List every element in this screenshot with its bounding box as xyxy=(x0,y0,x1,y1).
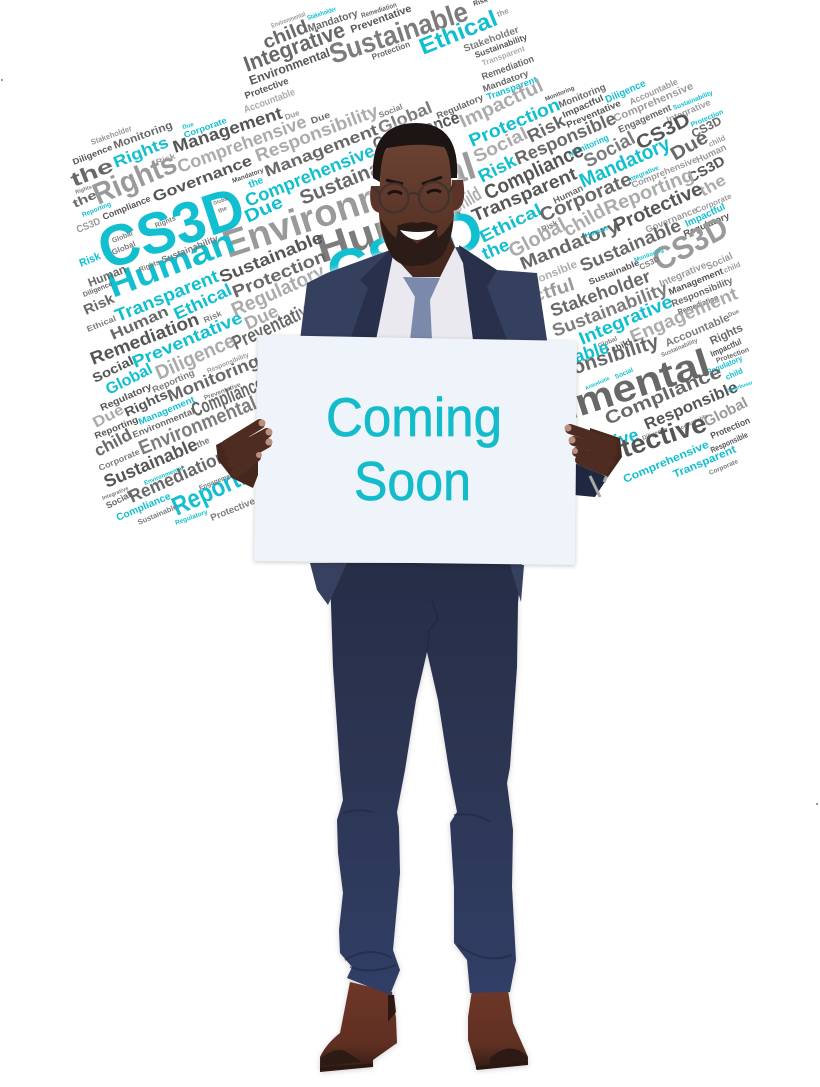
word cloud: right body cluster: Compliance xyxy=(602,361,725,429)
word cloud: right body cluster: Impactful xyxy=(709,336,743,359)
word cloud: right body cluster: Responsible xyxy=(510,258,579,296)
fingers xyxy=(570,429,612,470)
word cloud: top handle cluster: Ethical xyxy=(415,5,501,60)
word cloud: left body cluster: Sustainable xyxy=(136,502,179,527)
word cloud: right body cluster: Regulatory xyxy=(435,92,485,121)
sign board xyxy=(254,335,577,565)
word cloud: right body cluster: CS3D xyxy=(646,209,734,278)
word cloud: right body cluster: Sustainability xyxy=(672,89,714,112)
word cloud: top handle cluster: Preventative xyxy=(349,3,413,36)
lower body xyxy=(320,563,528,1072)
word cloud: left body cluster: Environmental xyxy=(218,145,481,267)
word cloud: right body cluster: Sustainable xyxy=(577,215,684,276)
word cloud: right body cluster: Solarbuear xyxy=(727,380,754,394)
word cloud: left body cluster: Rights xyxy=(111,134,171,172)
word cloud: left body cluster: Monitoring xyxy=(112,119,174,152)
word cloud: left body cluster: the xyxy=(68,155,117,192)
word cloud: right body cluster: Sustainability xyxy=(660,338,699,359)
hand: left xyxy=(216,420,272,488)
word cloud: right body cluster: Impactful xyxy=(561,93,605,120)
word cloud: right body cluster: child xyxy=(448,183,485,217)
shirt xyxy=(376,247,473,340)
hair xyxy=(373,123,457,182)
word cloud: right body cluster: Accountable xyxy=(628,77,679,107)
word cloud: left body cluster: Engagement xyxy=(198,470,238,492)
word cloud: left body cluster: Regulatory xyxy=(228,260,329,322)
word cloud: right body cluster: Monitoring xyxy=(557,82,608,111)
jacket xyxy=(260,247,560,470)
word cloud: top handle cluster: Remediation xyxy=(480,54,536,83)
smile xyxy=(400,230,435,240)
word cloud: left body cluster: Integrative xyxy=(102,486,130,502)
tie xyxy=(403,277,440,340)
word cloud: right body cluster: Accountable xyxy=(663,312,732,350)
word cloud: left body cluster: Preventative xyxy=(229,297,320,355)
word cloud: left body cluster: the xyxy=(195,435,211,450)
word cloud: right body cluster: the xyxy=(696,172,729,200)
word cloud: right body cluster: Preventative xyxy=(535,424,641,476)
word cloud: top handle cluster: Stakeholder xyxy=(306,6,338,22)
word cloud: left body cluster: Risk xyxy=(202,309,224,325)
palm xyxy=(216,430,258,488)
word cloud: left body cluster: Sustainability xyxy=(160,233,219,265)
word cloud: left body cluster: Sustainable xyxy=(297,146,411,210)
word cloud: right body cluster xyxy=(370,75,754,486)
word cloud: left body cluster: Comprehensive xyxy=(242,140,377,211)
word cloud: left body cluster: Diligence xyxy=(71,142,114,167)
word cloud: right body cluster: Comprehensive xyxy=(630,154,699,190)
word cloud: right body cluster: Responsible xyxy=(512,108,619,169)
word cloud: top handle cluster: Transparent xyxy=(485,74,538,102)
word cloud: right body cluster: Protection xyxy=(466,94,563,151)
word cloud: top handle cluster: Mandatory xyxy=(306,7,360,35)
word cloud: left body cluster: the xyxy=(218,206,229,215)
word cloud: left body cluster: the xyxy=(247,175,265,191)
sign text: Soon: Soon xyxy=(354,450,471,512)
word cloud: top handle cluster: Protection xyxy=(370,39,411,62)
word cloud: right body cluster: Human xyxy=(584,225,609,240)
head xyxy=(370,123,464,277)
word cloud: right body cluster: Protective xyxy=(573,407,710,478)
word cloud: right body cluster: Human xyxy=(695,142,728,166)
word cloud: right body cluster: CS3D xyxy=(633,109,694,154)
word cloud: left body cluster: Protective xyxy=(209,496,257,524)
word cloud: left body cluster: Preventative xyxy=(203,381,242,402)
word cloud: right body cluster: Diligence xyxy=(604,78,648,106)
word cloud: left body cluster: Compliance xyxy=(115,491,173,524)
word cloud: left body cluster: Protection xyxy=(229,247,329,302)
word cloud: right body cluster: Stakeholder xyxy=(548,266,653,321)
word cloud: left body cluster: Due xyxy=(241,301,281,334)
word cloud: left body cluster: Management xyxy=(170,103,285,157)
word cloud: right body cluster: Mandatory xyxy=(517,216,622,274)
word cloud: left body cluster: Reporting xyxy=(93,414,139,441)
word cloud: left body cluster: Global xyxy=(103,361,155,399)
word cloud: right body cluster: Responsibility xyxy=(522,330,663,395)
sign text: Coming: Coming xyxy=(326,386,502,448)
ears xyxy=(370,180,464,213)
word cloud: left body cluster: Environmental xyxy=(131,406,196,440)
word cloud: right body cluster: Impactful xyxy=(456,75,547,133)
word cloud: right body cluster: Risk xyxy=(540,218,560,234)
word cloud: left body cluster: Environmental xyxy=(144,466,185,487)
word cloud: left body cluster: Regulatory xyxy=(174,509,209,527)
word cloud: right body cluster: Regulatory xyxy=(682,210,731,239)
word cloud: left body cluster: Rights xyxy=(88,147,182,211)
word cloud: top handle cluster: Accountable xyxy=(242,87,297,116)
word cloud: right body cluster: Diligence xyxy=(642,426,669,442)
word cloud: right body cluster: Impactful xyxy=(684,201,727,230)
word cloud: left body cluster: Due xyxy=(241,192,286,227)
word cloud: right body cluster: CS3D xyxy=(689,114,724,141)
word cloud: left body cluster: Rights xyxy=(75,184,93,196)
word cloud: left body cluster: Global xyxy=(111,230,134,245)
word cloud: left body cluster: Diligence xyxy=(82,281,114,299)
word cloud: left body cluster: Ethical xyxy=(85,314,117,334)
word cloud: left body cluster: Regulatory xyxy=(99,381,154,414)
word cloud: top handle cluster: Environmental xyxy=(270,11,307,30)
word cloud: right body cluster: Management xyxy=(667,266,725,297)
word cloud: left body cluster: Human xyxy=(108,303,171,344)
person holding sign xyxy=(216,123,622,1072)
word cloud: top handle cluster: child xyxy=(260,17,311,54)
word cloud: right body cluster: Responsibility xyxy=(670,275,735,310)
word cloud: right body cluster: Global xyxy=(505,214,570,262)
word cloud: left body cluster: Social xyxy=(377,102,404,120)
word cloud: left body cluster: Mandatory xyxy=(231,167,265,185)
word cloud: left body cluster: Social xyxy=(90,353,136,386)
beard xyxy=(380,218,453,266)
word cloud: left body cluster: Environmental xyxy=(136,392,260,460)
word cloud: right body cluster: Comprehensive xyxy=(621,439,711,486)
word cloud: right body cluster: Corporate xyxy=(537,169,635,227)
word cloud: left body cluster: Transparent xyxy=(112,266,221,326)
word cloud: left body cluster: CS3D xyxy=(319,196,491,307)
word cloud: left body cluster: Corporate xyxy=(97,446,142,473)
word cloud: right body cluster: Social xyxy=(614,367,634,381)
word cloud: right body cluster: Integrative xyxy=(665,97,712,125)
word cloud: right body cluster: Protection xyxy=(709,415,751,441)
eyes xyxy=(388,190,441,194)
word cloud: top handle cluster: Integrative xyxy=(240,17,348,77)
word cloud: left body cluster: Comprehensive xyxy=(175,111,309,177)
word cloud: left body cluster: Compliance xyxy=(189,373,266,422)
boot: left xyxy=(320,982,397,1072)
word cloud: right body cluster: Antioduitie xyxy=(584,376,611,392)
word cloud: right body cluster: child xyxy=(609,337,633,355)
word cloud: left body cluster: Rights xyxy=(138,259,161,274)
word cloud: right body cluster: Preventative xyxy=(565,98,622,130)
word cloud: right body cluster: Ethical xyxy=(476,200,545,247)
upper body xyxy=(260,123,613,497)
word cloud: right body cluster: Remediation xyxy=(676,293,720,317)
word cloud: right body cluster: Sustainable xyxy=(587,257,641,287)
word cloud: briefcase shape xyxy=(68,0,754,527)
word cloud: right body cluster: Engagement xyxy=(617,102,674,136)
word cloud: right body cluster: Social xyxy=(705,251,735,273)
word cloud: right body cluster: Global xyxy=(597,335,619,350)
word cloud: left body cluster: Responsibility xyxy=(206,352,250,375)
sign panel xyxy=(254,335,577,565)
word cloud: right body cluster: child xyxy=(560,201,609,241)
word cloud: left body cluster: Ethical xyxy=(171,280,235,324)
word cloud: left body cluster xyxy=(68,100,491,527)
word cloud: right body cluster: Engagement xyxy=(627,283,740,347)
word cloud: right body cluster: Mandatory xyxy=(576,133,674,193)
word cloud: top handle cluster xyxy=(240,0,538,116)
word cloud: left body cluster: Risk xyxy=(81,290,117,318)
word cloud: right body cluster: Sustainability xyxy=(549,278,670,341)
word cloud: right body cluster: Due xyxy=(728,309,741,319)
jacket sleeve: right xyxy=(574,463,608,497)
word cloud: right body cluster: CS3D xyxy=(685,152,727,186)
boot: right xyxy=(468,990,528,1070)
word cloud: right body cluster: Accountable xyxy=(676,413,709,433)
word cloud: left body cluster: Global xyxy=(110,239,137,257)
word cloud: right body cluster: Monitoring xyxy=(567,132,610,159)
word cloud: left body cluster: Governance xyxy=(150,152,254,206)
word cloud: right body cluster: Risk xyxy=(475,150,520,187)
word cloud: top handle cluster: Mandatory xyxy=(481,68,530,94)
jacket flap: right xyxy=(510,565,524,602)
word cloud: left body cluster: child xyxy=(91,425,135,461)
word cloud: right body cluster: Integrative xyxy=(576,291,676,349)
word cloud: left body cluster: Diligence xyxy=(152,330,239,385)
word cloud: right body cluster: Integrative xyxy=(658,260,709,290)
word cloud: left body cluster: Remediation xyxy=(87,309,202,369)
word cloud: right body cluster: Transparent xyxy=(671,443,738,481)
word cloud: right body cluster: Responsible xyxy=(642,379,741,434)
word cloud: left body cluster: Management xyxy=(262,122,381,181)
neck xyxy=(392,235,455,277)
word cloud: right body cluster: Reporting xyxy=(601,165,697,220)
word cloud: right body cluster: Governance xyxy=(370,108,462,154)
jacket flap: left xyxy=(310,563,347,605)
word cloud: left body cluster: Due xyxy=(90,401,127,432)
word cloud: left body cluster: Due xyxy=(309,110,331,126)
word cloud: left body cluster: Reporting xyxy=(81,201,112,219)
word cloud: left body cluster: Risk xyxy=(78,250,103,270)
trouser folds xyxy=(343,600,512,971)
trousers xyxy=(329,563,522,995)
word cloud: left body cluster: Reporting xyxy=(151,367,196,395)
word cloud: left body cluster: Stakeholder xyxy=(90,124,133,147)
word cloud: right body cluster: Protection xyxy=(715,346,750,365)
jacket lapels xyxy=(350,245,507,340)
word cloud: right body cluster: Rights xyxy=(708,322,745,348)
word cloud: right body cluster: Governance xyxy=(644,205,699,236)
word cloud: left body cluster: Human xyxy=(102,222,240,305)
word cloud: top handle cluster: Stakeholder xyxy=(462,25,521,55)
word cloud: left body cluster: Social xyxy=(104,489,132,511)
word cloud: right body cluster: the xyxy=(479,234,512,264)
word cloud: right body cluster: Corporate xyxy=(694,191,733,215)
word cloud: right body cluster: Protection xyxy=(690,109,725,129)
word cloud: right body cluster: Integrative xyxy=(627,164,660,184)
word cloud: left body cluster: CS3D xyxy=(75,216,102,236)
word cloud: right body cluster: Corporate xyxy=(708,458,740,477)
word cloud: top handle cluster: Sustainability xyxy=(473,32,529,60)
word cloud: left body cluster: CS3D xyxy=(90,174,253,282)
word cloud: left body cluster: Compliance xyxy=(101,193,152,222)
word cloud: left body cluster: the xyxy=(70,187,99,211)
word cloud: right body cluster: Global xyxy=(375,98,435,138)
word cloud: left body cluster: Remediation xyxy=(125,446,230,507)
glasses xyxy=(373,182,455,212)
word cloud: right body cluster: Social xyxy=(580,128,639,172)
word cloud: right body cluster: child xyxy=(722,260,742,275)
word cloud: top handle cluster: Transparent xyxy=(481,44,526,68)
word cloud: left body cluster: Corporate xyxy=(182,115,228,140)
word cloud: left body cluster: Risk xyxy=(155,151,177,167)
word cloud: right body cluster: Regulatory xyxy=(705,354,744,377)
word cloud: right body cluster: child xyxy=(707,133,727,149)
word cloud: left body cluster: Sustainable xyxy=(216,228,325,287)
word cloud: top handle cluster: Environmental xyxy=(247,46,332,88)
watch strap and cuff xyxy=(590,462,613,497)
face xyxy=(379,145,454,267)
word cloud: left body cluster: Due xyxy=(182,122,195,131)
word cloud: left body cluster: Human xyxy=(311,183,467,272)
word cloud: right body cluster: Global xyxy=(701,394,751,431)
word cloud: right body cluster: Risk xyxy=(524,110,569,147)
word cloud: right body cluster: Human xyxy=(551,183,585,206)
back of hand xyxy=(590,428,622,477)
word cloud: left body cluster: Global xyxy=(213,196,230,207)
word cloud: right body cluster: Protective xyxy=(610,179,706,237)
word cloud: right body cluster: Responsible xyxy=(709,430,750,455)
word cloud: right body cluster: Monitoring xyxy=(545,86,576,103)
word cloud: top handle cluster: the xyxy=(496,6,510,19)
word cloud: right body cluster: child xyxy=(724,366,744,382)
fingers xyxy=(226,424,267,473)
word cloud: left body cluster: Management xyxy=(137,394,196,427)
word cloud: left body cluster: Preventative xyxy=(129,308,245,372)
hand: right xyxy=(564,424,622,477)
word cloud: right body cluster: Sustainable xyxy=(510,337,611,387)
word cloud: right body cluster: Social xyxy=(470,123,531,167)
word cloud: left body cluster: Sustainable xyxy=(101,434,201,492)
word cloud: left body cluster: Human xyxy=(86,262,128,290)
word cloud: left body cluster: Due xyxy=(284,108,301,122)
word cloud: right body cluster: Comprehensive xyxy=(611,80,695,125)
word cloud: top handle cluster: Protective xyxy=(243,76,290,102)
word cloud: right body cluster: Monitoring xyxy=(634,248,665,264)
word cloud: right body cluster: Transparent xyxy=(469,164,580,226)
word cloud: left body cluster: Rights xyxy=(154,215,177,230)
word cloud: right body cluster: CS3D xyxy=(638,254,661,272)
word cloud: left body cluster: Monitoring xyxy=(164,351,262,406)
stray dots xyxy=(1,79,818,805)
mustache xyxy=(397,222,438,232)
word cloud: top handle cluster: Remediation xyxy=(360,2,398,20)
word cloud: left body cluster: Rights xyxy=(122,387,170,420)
word cloud: left body cluster: Responsibility xyxy=(252,100,381,166)
word cloud: right body cluster: Impactful xyxy=(485,274,577,321)
eyebrows xyxy=(386,177,442,184)
word cloud: right body cluster: Due xyxy=(667,127,712,165)
word cloud: left body cluster: Reporting xyxy=(167,450,275,521)
fingertips xyxy=(256,420,272,458)
word cloud: right body cluster: Compliance xyxy=(481,139,587,205)
fingertips xyxy=(564,424,578,454)
word cloud: right body cluster: Environmental xyxy=(417,342,715,475)
